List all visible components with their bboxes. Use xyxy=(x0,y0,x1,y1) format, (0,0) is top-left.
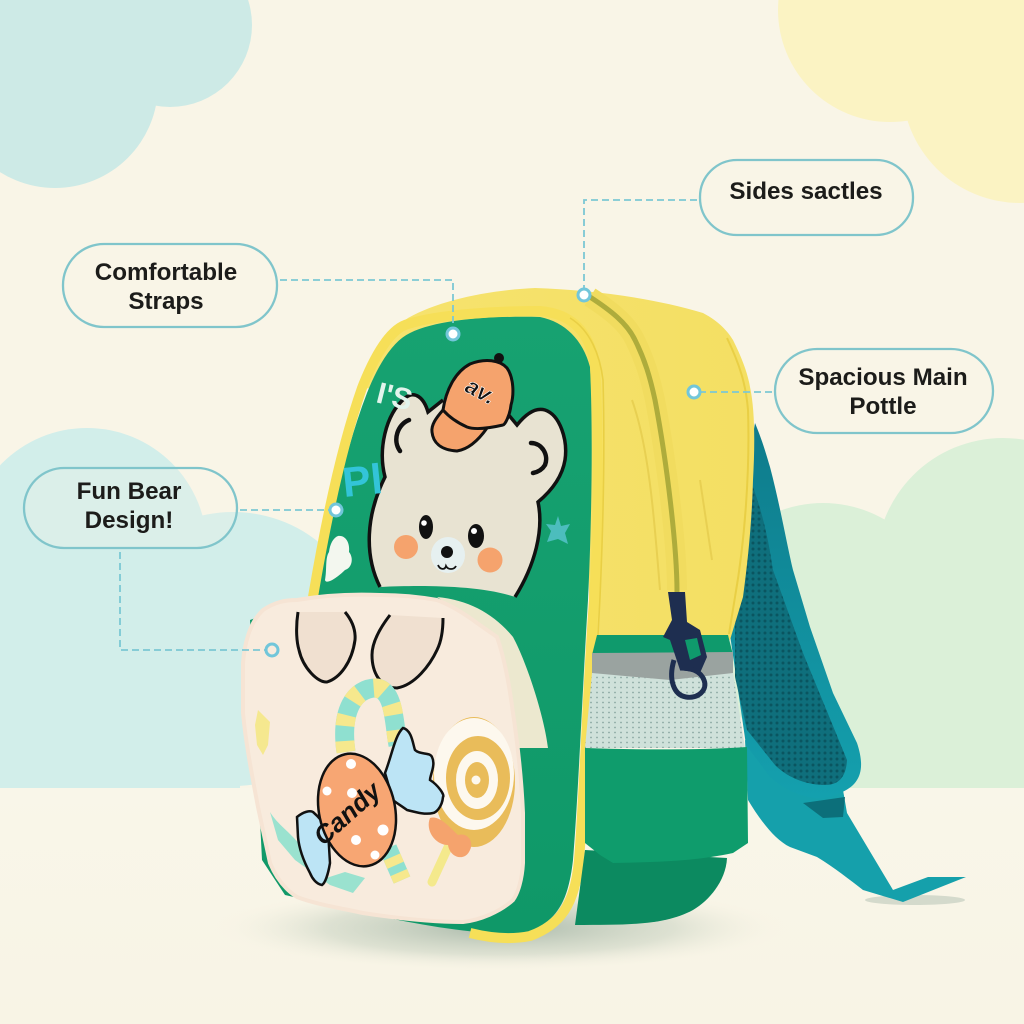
callout: comfortable straps: Comfortable xyxy=(95,259,237,286)
background cloud: top right yellow xyxy=(778,0,1024,203)
bear left foot xyxy=(297,612,355,682)
bear snout xyxy=(431,537,465,573)
cream front pocket xyxy=(243,595,523,922)
callout: fun bear design: Design! xyxy=(85,507,173,534)
lower green side pocket xyxy=(575,635,748,925)
candy dots xyxy=(322,759,388,860)
piping stitch line xyxy=(570,318,604,635)
bear head fill xyxy=(369,395,566,597)
back strap and mesh padding xyxy=(725,423,966,902)
bear head outline xyxy=(369,395,566,597)
callout: sides sactles: Sides sactles xyxy=(729,178,883,205)
candy label: Candy xyxy=(307,775,388,851)
callout: spacious main pottle xyxy=(688,349,993,433)
bear design: I'S xyxy=(373,377,416,417)
ground shadow xyxy=(210,884,790,972)
strap shadow xyxy=(865,895,965,905)
fabric folds xyxy=(632,400,712,590)
main yellow side panel xyxy=(362,288,754,640)
bear design xyxy=(325,354,570,597)
background cloud: left teal xyxy=(0,428,370,790)
bear right foot xyxy=(372,615,443,688)
star sticker xyxy=(546,516,570,544)
orange cap xyxy=(432,354,513,451)
zipper seam xyxy=(590,297,677,592)
bear eyes xyxy=(419,515,484,548)
zipper pull xyxy=(663,592,707,697)
background cloud: top left teal xyxy=(0,0,252,188)
panel lettering: Pl xyxy=(340,455,385,506)
floor xyxy=(0,788,1024,1024)
candy left wrapper xyxy=(297,811,330,885)
callout: fun bear design xyxy=(24,468,342,656)
candy right wrapper xyxy=(385,728,443,814)
green front panel xyxy=(250,317,592,934)
background cloud: right green xyxy=(700,438,1024,790)
bear cheeks xyxy=(394,535,502,572)
callout: sides sactles xyxy=(578,160,913,301)
yellow piping xyxy=(313,311,598,938)
candy cane xyxy=(345,688,402,880)
yellow star xyxy=(255,710,270,755)
callout: spacious main pottle: Pottle xyxy=(849,393,917,420)
callout: spacious main pottle: Spacious Main xyxy=(798,364,968,391)
lollipop xyxy=(429,717,515,882)
zipper tape xyxy=(590,297,677,590)
bear inner ears xyxy=(396,420,546,473)
backpack xyxy=(243,288,966,938)
teal splat xyxy=(270,812,365,893)
side panel piping xyxy=(727,338,748,634)
callout: comfortable straps xyxy=(63,244,459,340)
cloud sticker xyxy=(325,536,352,582)
cap monogram: av. xyxy=(461,372,500,410)
candy body xyxy=(308,746,406,874)
callout: comfortable straps: Straps xyxy=(128,288,204,315)
callout: fun bear design: Fun Bear xyxy=(77,478,182,505)
front pocket zipper gusset xyxy=(437,597,548,748)
